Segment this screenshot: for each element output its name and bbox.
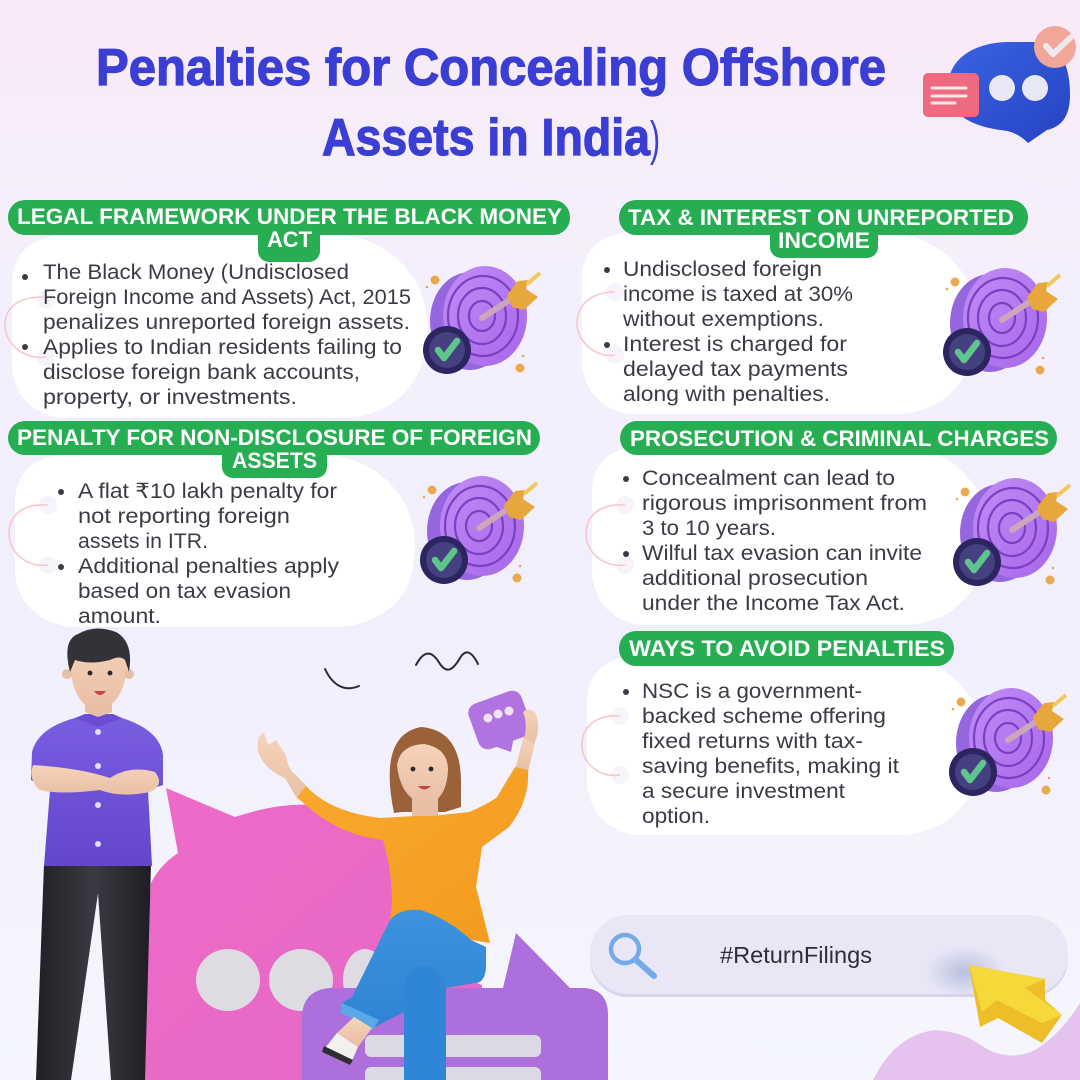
speech bubble: pink xyxy=(145,788,482,1080)
neck xyxy=(412,795,438,818)
text block: penalty: not reporting foreign xyxy=(78,505,290,528)
heading: ways to avoid penalties xyxy=(619,631,954,666)
text block: legal framework: disclose foreign bank accounts, xyxy=(43,361,360,384)
sweater xyxy=(297,767,528,943)
text block: legal framework: Applies to Indian residents failing to xyxy=(43,336,402,359)
text block: penalty: Additional penalties apply xyxy=(78,555,340,578)
text block: penalty: based on tax evasion xyxy=(78,580,291,603)
shirt xyxy=(31,715,163,866)
hair xyxy=(390,727,461,813)
speech bubble: purple xyxy=(302,933,608,1080)
text block: tax and interest xyxy=(604,258,853,406)
title: Penalties for Concealing Offshore xyxy=(96,39,886,97)
icon: magnifier xyxy=(611,935,654,976)
text block: legal framework: property, or investments. xyxy=(43,386,297,409)
text block: legal framework: Foreign Income and Assets) Act, 2015 xyxy=(43,286,411,309)
text block: penalty: amount. xyxy=(78,605,161,628)
character: man xyxy=(31,628,163,1080)
icon: chat bubble with check xyxy=(923,26,1076,143)
heading: legal framework: LEGAL FRAMEWORK UNDER THE BLACK MONEY xyxy=(17,204,562,229)
character: woman xyxy=(258,688,538,1080)
text block: prosecution: additional prosecution xyxy=(642,567,868,590)
panel: ways to avoid penalties xyxy=(582,631,1066,835)
title: Assets in India xyxy=(322,109,651,167)
icon: target xyxy=(949,688,1066,796)
panel: prosecution xyxy=(586,421,1070,625)
ankle and shoe xyxy=(337,1017,372,1047)
panel: legal framework xyxy=(5,200,570,418)
title: ) xyxy=(650,113,660,166)
heading: tax and interest xyxy=(619,200,1028,258)
decorative squiggles xyxy=(325,652,478,688)
text block: penalty: assets in ITR. xyxy=(78,530,208,553)
forearm right xyxy=(515,735,536,772)
trousers xyxy=(36,864,151,1080)
raised arm left hand xyxy=(258,733,310,800)
icon: target xyxy=(423,266,540,374)
text block: tax and interest: delayed tax payments xyxy=(623,358,848,381)
search text: #ReturnFilings xyxy=(720,942,872,968)
heading: penalty xyxy=(8,421,540,478)
hand on bubble xyxy=(523,709,538,744)
text block: prosecution: Wilful tax evasion can invite xyxy=(642,542,922,565)
text block: tax and interest: Undisclosed foreign xyxy=(623,258,822,281)
text block: penalty xyxy=(58,480,340,628)
text block: ways to avoid penalties xyxy=(623,680,899,828)
icon: target xyxy=(943,268,1060,376)
text block: penalty: A flat ₹10 lakh penalty for xyxy=(78,480,337,503)
face xyxy=(397,744,448,803)
panel: penalty for non-disclosure xyxy=(8,421,540,628)
heading: legal framework xyxy=(8,200,570,262)
text block: tax and interest: Interest is charged for xyxy=(623,333,847,356)
text block: ways to avoid penalties: saving benefits, making it xyxy=(642,755,899,778)
icon: target xyxy=(953,478,1070,586)
search bar xyxy=(590,915,1068,998)
text block: ways to avoid penalties: NSC is a government- xyxy=(642,680,862,703)
heading: ways to avoid penalties: WAYS TO AVOID PENALTIES xyxy=(629,636,945,661)
hair xyxy=(67,628,130,672)
text block: prosecution: rigorous imprisonment from xyxy=(642,492,927,515)
speech bubble held xyxy=(465,688,535,752)
heading: penalty: ASSETS xyxy=(232,448,317,473)
text block: prosecution: under the Income Tax Act. xyxy=(642,592,905,615)
text block: ways to avoid penalties: a secure investment xyxy=(642,780,845,803)
heading: tax and interest: TAX & INTEREST ON UNREPORTED xyxy=(628,205,1014,230)
text block: prosecution xyxy=(623,467,927,615)
text block: tax and interest: without exemptions. xyxy=(622,308,824,331)
text block: legal framework: The Black Money (Undisclosed xyxy=(43,261,349,284)
text block: prosecution: Concealment can lead to xyxy=(642,467,895,490)
title xyxy=(96,39,886,167)
arms xyxy=(32,765,159,795)
heading: penalty: PENALTY FOR NON-DISCLOSURE OF FOREIGN xyxy=(17,425,532,450)
text block: ways to avoid penalties: backed scheme offering xyxy=(642,705,886,728)
heading: prosecution: PROSECUTION & CRIMINAL CHARGES xyxy=(630,426,1049,451)
text block: ways to avoid penalties: fixed returns with tax- xyxy=(642,730,863,753)
text block: legal framework xyxy=(22,261,411,409)
heading: prosecution xyxy=(620,421,1057,455)
text block: ways to avoid penalties: option. xyxy=(642,805,710,828)
decorative wave xyxy=(873,1003,1080,1080)
text block: legal framework: penalizes unreported foreign assets. xyxy=(43,311,410,334)
neck and face xyxy=(85,695,112,717)
text block: tax and interest: income is taxed at 30% xyxy=(623,283,853,306)
text block: tax and interest: along with penalties. xyxy=(623,383,830,406)
heading: legal framework: ACT xyxy=(267,227,313,252)
icon: target xyxy=(420,476,537,584)
jeans xyxy=(342,910,486,1080)
text block: prosecution: 3 to 10 years. xyxy=(642,517,776,540)
panel: tax and interest xyxy=(577,200,1060,414)
icon: cursor arrow xyxy=(969,965,1062,1043)
heading: tax and interest: INCOME xyxy=(778,228,870,253)
